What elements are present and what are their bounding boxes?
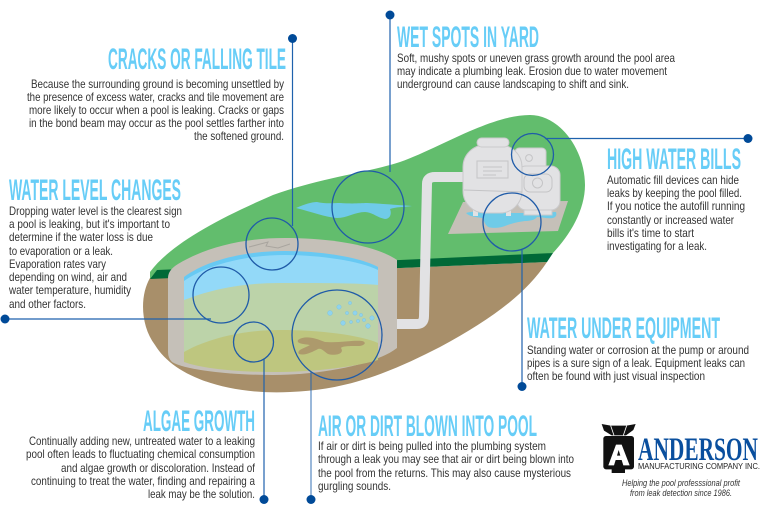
pool floor sediment <box>184 330 378 372</box>
section: wet spots in yard <box>397 21 675 91</box>
body text <box>397 52 675 91</box>
water surface edge <box>184 251 378 281</box>
section: water under equipment <box>527 312 749 383</box>
body text: Soft, mushy spots or uneven grass growth around the pool area <box>397 52 675 65</box>
pool water <box>184 252 378 345</box>
logo: Anderson Manufacturing <box>602 424 760 499</box>
body text <box>27 78 284 143</box>
leader: air or dirt <box>306 372 316 504</box>
body text: determine if the water loss is due <box>9 231 153 244</box>
plumbing pipe <box>395 177 470 324</box>
body text: may indicate a plumbing leak. Erosion due to water movement <box>397 65 668 78</box>
body text: leak may be the solution. <box>148 488 255 501</box>
pump seam <box>464 190 522 192</box>
body text: bills it's time to start <box>607 227 695 240</box>
ground illustration <box>143 115 585 392</box>
filter body <box>517 166 560 210</box>
body text: often be found with just visual inspection <box>527 370 705 383</box>
body text: gurgling sounds. <box>318 480 391 493</box>
air bubbles <box>328 301 374 328</box>
grass area <box>150 115 585 279</box>
section: water level changes <box>8 174 182 311</box>
body text: and algae growth or discoloration. Instead of <box>61 462 256 475</box>
body text: Dropping water level is the clearest sign <box>9 205 182 218</box>
pool equipment <box>448 138 568 234</box>
body text: the pool from the returns. This may also cause mysterious <box>318 467 571 480</box>
soil area <box>143 262 547 392</box>
infographic canvas: CRACKS OR FALLING TILE <box>108 43 286 76</box>
body text: the presence of excess water, cracks and tile movement are <box>27 91 284 104</box>
section: wet spots in yard: WET SPOTS IN YARD <box>397 21 539 54</box>
concrete pad <box>448 201 568 234</box>
pool <box>168 238 397 375</box>
filter panel <box>524 174 552 192</box>
body text: a pool is leaking, but it's important to <box>9 218 170 231</box>
control dial <box>526 155 532 161</box>
body text <box>607 174 745 253</box>
body text: more likely to occur when a pool is leaking. Cracks or gaps <box>29 104 284 117</box>
body text: Automatic fill devices can hide <box>607 174 739 187</box>
body text: water temperature, humidity <box>8 284 131 297</box>
body text: constantly or increased water <box>607 214 734 227</box>
logo icon <box>602 424 636 473</box>
body text: Continually adding new, untreated water to a leaking <box>29 435 255 448</box>
body text: investigating for a leak. <box>607 240 707 253</box>
body text <box>8 205 182 311</box>
back control box <box>515 148 546 170</box>
body text <box>26 435 256 501</box>
body text <box>527 344 749 383</box>
section: air or dirt blown into pool <box>318 410 574 493</box>
body text: leaks by keeping the pool filled. <box>607 187 742 200</box>
body text: depending on wind, air and <box>9 271 127 284</box>
leader: wet spots <box>386 10 394 172</box>
callout circle: algae <box>234 322 274 362</box>
infographic canvas: WATER LEVEL CHANGES <box>9 174 181 207</box>
callout circle: wet spots <box>332 171 404 243</box>
callout circle: water level <box>193 267 249 323</box>
body text: and other factors. <box>9 298 86 311</box>
leader: algae <box>260 359 268 504</box>
leader: water level <box>0 314 211 324</box>
leader: water bills <box>545 134 752 143</box>
leader: cracks <box>288 34 297 226</box>
body text: in the bond beam may occur as the pool settles farther into <box>29 117 284 130</box>
section: cracks or falling tile <box>27 43 286 143</box>
body text: Because the surrounding ground is becoming unsettled by <box>31 78 284 91</box>
pump label <box>477 161 508 178</box>
dirt patch <box>298 337 365 355</box>
body text: through a leak you may see that air or dirt being blown into <box>318 453 574 466</box>
body text: to evaporation or a leak. <box>9 245 113 258</box>
discoloured water <box>184 283 378 360</box>
section: algae growth <box>26 405 256 501</box>
body text: If air or dirt is being pulled into the plumbing system <box>318 440 546 453</box>
callout circle: cracks <box>246 218 298 270</box>
callout circle: water bills <box>512 134 554 176</box>
body text: pool often leads to fluctuating chemical consumption <box>26 448 255 461</box>
body text: underground can cause landscaping to shift and sink. <box>397 78 629 91</box>
body text <box>318 440 574 493</box>
tagline: from leak detection since 1986. <box>630 488 732 499</box>
body text: If you notice the autofill running <box>607 200 745 213</box>
pump body <box>463 145 522 213</box>
pump base <box>524 208 552 215</box>
callout circle: under equipment <box>483 193 541 251</box>
body text: Evaporation rates vary <box>9 258 106 271</box>
pool wall <box>168 238 397 375</box>
filter gauge <box>532 178 542 188</box>
section: high water bills <box>607 143 745 253</box>
infographic canvas: ALGAE GROWTH <box>143 405 255 438</box>
body text: the softened ground. <box>194 130 284 143</box>
leader: under equipment <box>518 250 526 391</box>
body text: continuing to treat the water, finding and repairing a <box>31 475 255 488</box>
pump cap <box>477 138 509 147</box>
wet spot in yard <box>296 202 412 219</box>
callout circle: air or dirt <box>292 290 382 380</box>
pump feet <box>473 209 511 216</box>
standing water under equipment <box>466 212 556 228</box>
wall crack <box>249 242 290 248</box>
tagline <box>622 478 740 499</box>
dark grass edge <box>150 253 553 279</box>
